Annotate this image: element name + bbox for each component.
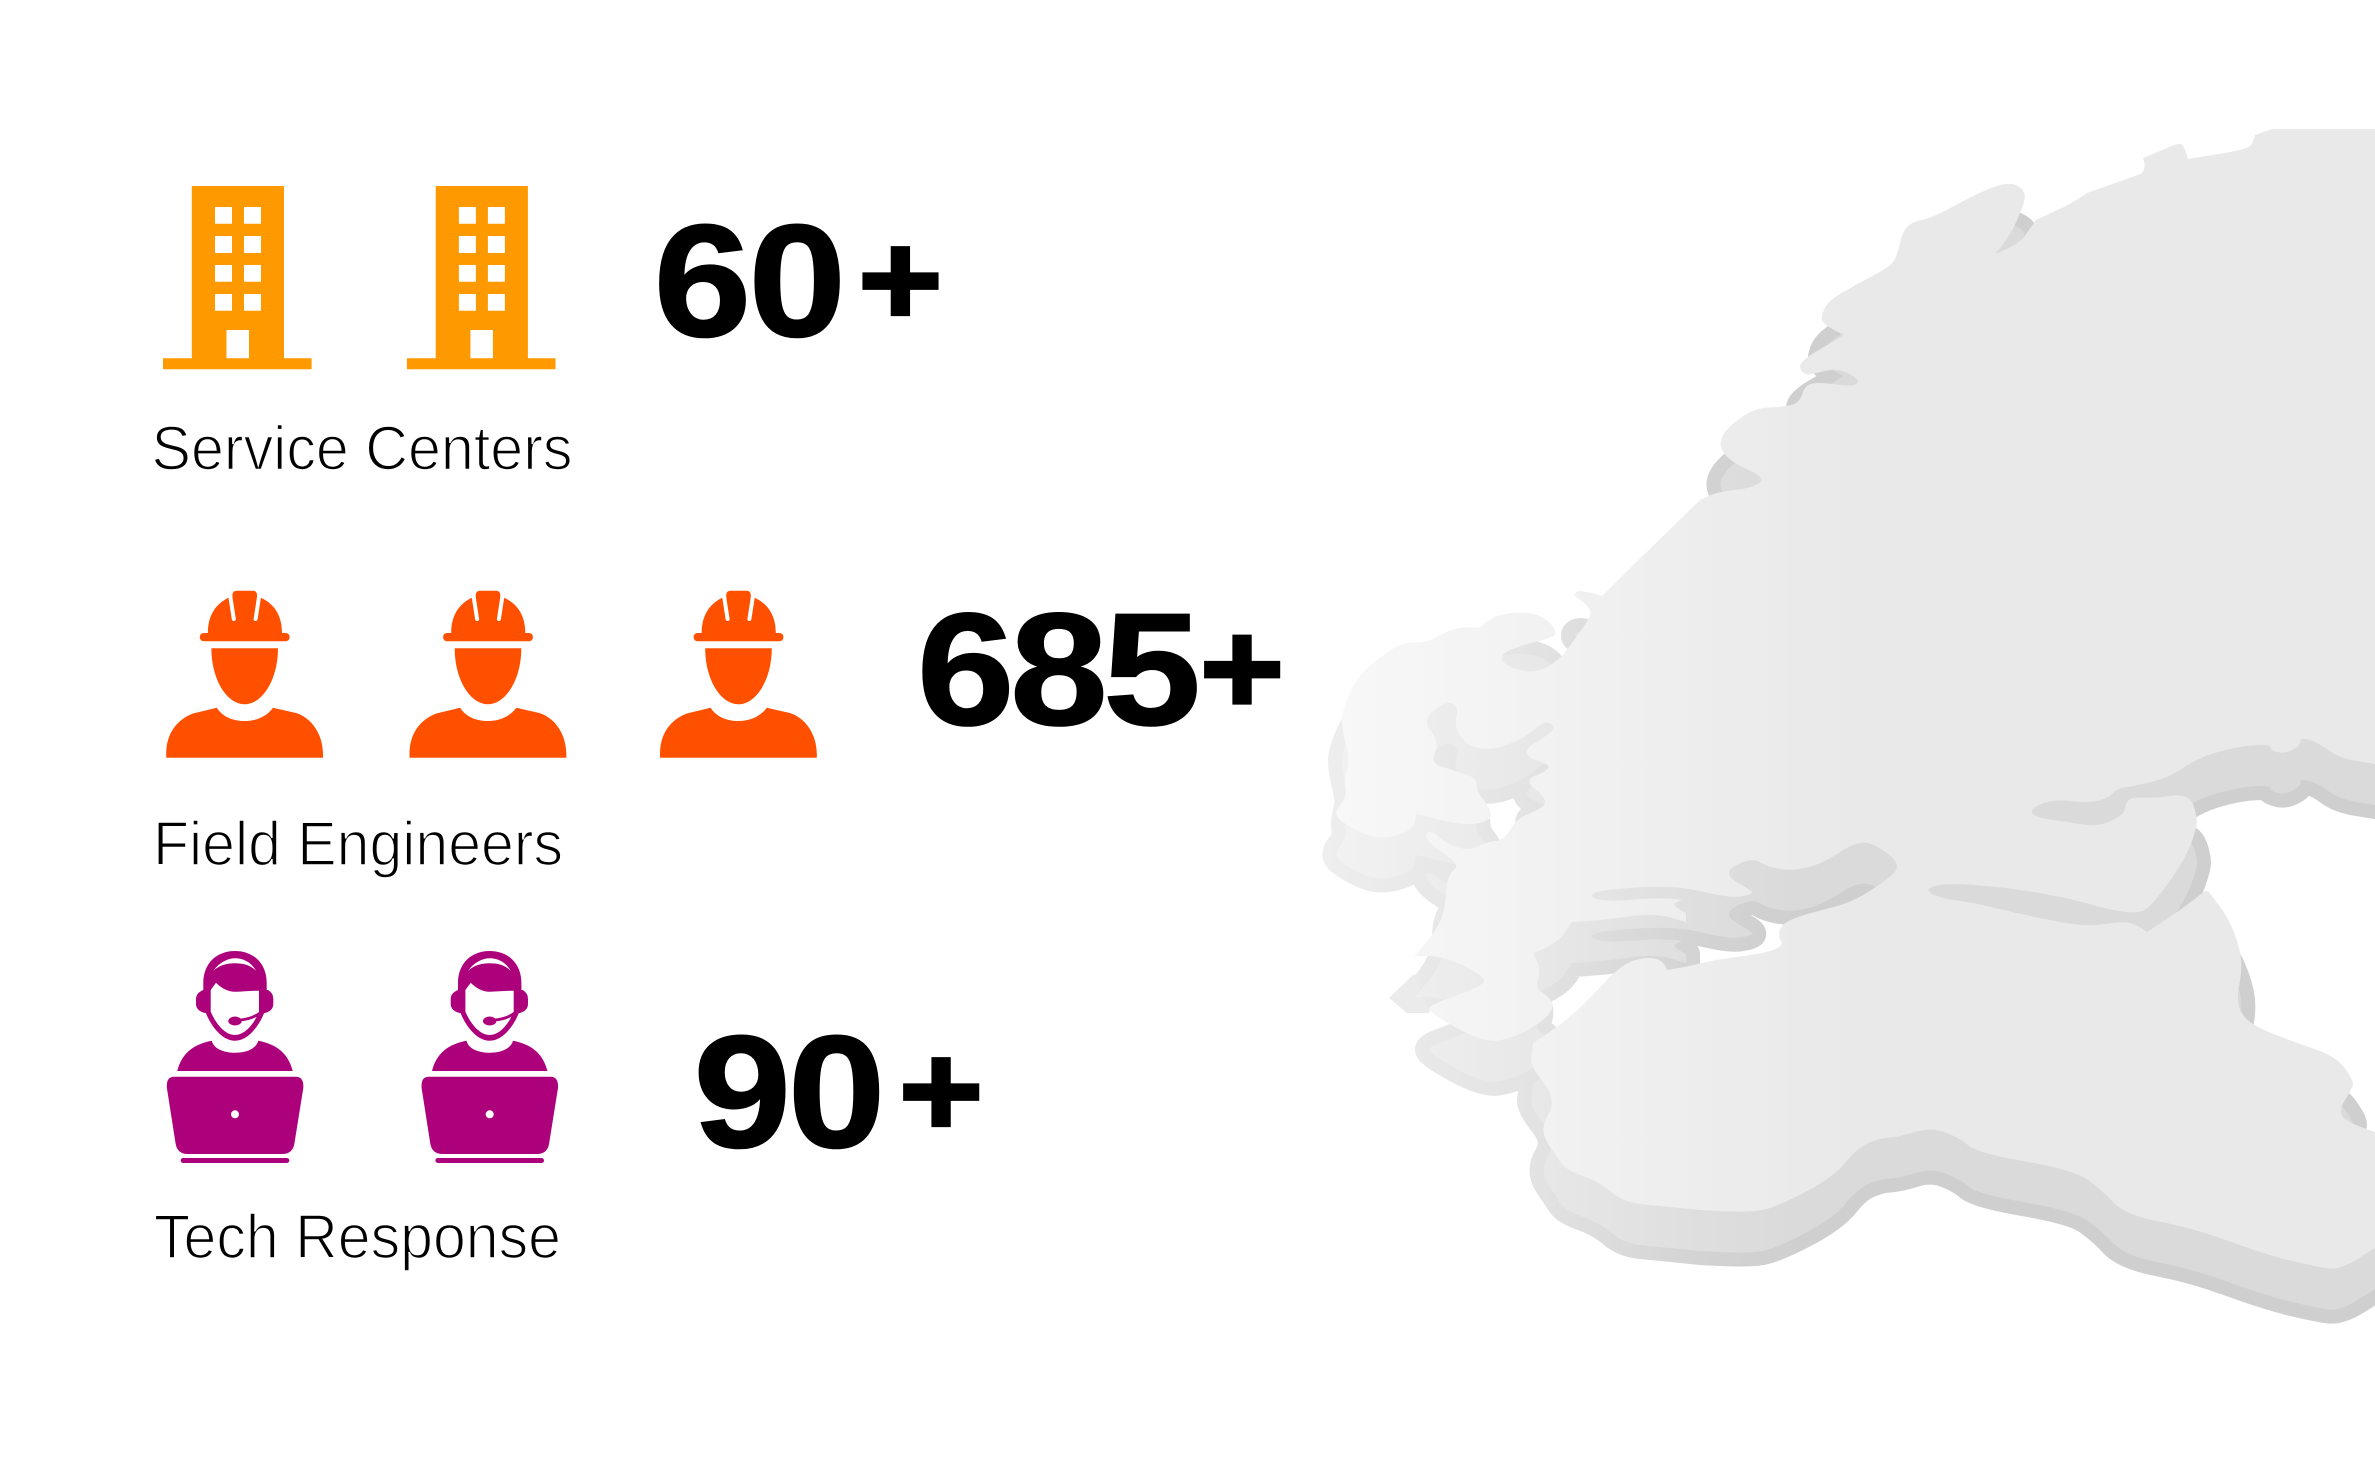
icon: support agent 1 xyxy=(167,951,303,1163)
stat: 685+: + xyxy=(1200,595,1284,742)
stat: 90+: + xyxy=(899,1017,983,1165)
label: service centers: Service Centers xyxy=(152,414,572,484)
label: tech response: Tech Response xyxy=(154,1203,561,1272)
icon: building 1 xyxy=(163,186,312,369)
map: top face xyxy=(1336,129,2375,1269)
icon: building 2 xyxy=(407,186,556,369)
map: lowest shadow layer xyxy=(1336,170,2375,1310)
row: service centers xyxy=(152,186,943,484)
icon: engineer 1 xyxy=(166,591,323,758)
map: western spur of shadow layer xyxy=(1389,974,1430,1013)
row: tech response xyxy=(154,951,983,1272)
icon: engineer 2 xyxy=(409,591,566,758)
stat: 685+: 685 xyxy=(917,580,1201,759)
icon: support agent 2 xyxy=(422,951,558,1163)
icon: engineer 3 xyxy=(660,591,817,758)
map of Europe xyxy=(1336,129,2375,1310)
row: field engineers xyxy=(153,580,1284,879)
stat: 90+: 90 xyxy=(693,1002,886,1181)
label: field engineers: Field Engineers xyxy=(153,810,563,879)
stat: 60+: + xyxy=(858,206,943,354)
map: extruded side layer xyxy=(1336,170,2375,1310)
stat: 60+: 60 xyxy=(654,191,846,370)
